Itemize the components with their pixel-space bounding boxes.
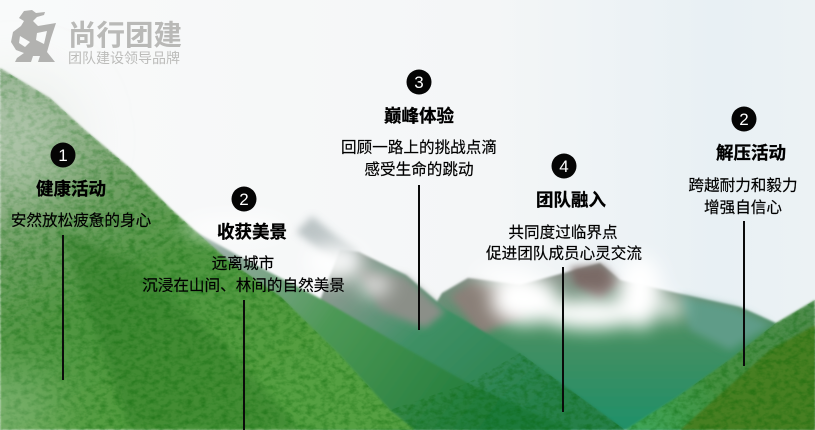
number badge 1: 1 — [58, 146, 68, 165]
description: 促进团队成员心灵交流 — [486, 244, 642, 262]
central ridge — [320, 250, 625, 430]
connector line — [418, 185, 420, 330]
brand name: 尚行团建 — [68, 20, 182, 52]
second forested slope — [187, 227, 572, 430]
right forested slope — [625, 300, 815, 430]
left forested slope — [0, 68, 415, 430]
brand slogan: 团队建设领导品牌 — [68, 50, 180, 66]
number badge 2: 2 — [739, 110, 749, 129]
description: 回顾一路上的挑战点滴 — [341, 138, 497, 156]
number badge 2 — [232, 186, 256, 212]
item: 收获美景 — [142, 186, 345, 430]
heading: 收获美景 — [217, 222, 287, 242]
connector line — [62, 235, 64, 380]
heading: 团队融入 — [536, 190, 606, 210]
description: 跨越耐力和毅力 — [688, 176, 798, 194]
darker right slope foreground — [680, 325, 815, 430]
icon: dragon — [11, 10, 56, 62]
number badge 3: 3 — [414, 73, 424, 92]
description: 增强自信心 — [704, 198, 782, 216]
item: 团队融入 — [486, 154, 642, 412]
heading: 健康活动 — [36, 179, 106, 199]
item: 巅峰体验 — [341, 70, 497, 330]
number badge 3 — [406, 70, 432, 94]
description — [688, 176, 798, 216]
connector line — [743, 221, 745, 366]
item: 健康活动 — [11, 142, 152, 380]
clouds — [185, 217, 682, 329]
distant mountains — [420, 263, 776, 430]
description: 安然放松疲惫的身心 — [11, 212, 152, 230]
description: 沉浸在山间、林间的自然美景 — [142, 276, 345, 294]
number badge 2 — [732, 106, 756, 132]
description — [486, 224, 642, 262]
number badge 4: 4 — [559, 157, 569, 176]
description — [341, 138, 497, 178]
number badge 1 — [50, 142, 76, 168]
heading: 解压活动 — [716, 143, 786, 163]
faint distant peak through the mist — [296, 216, 358, 268]
logo — [11, 10, 182, 66]
number badge 4 — [552, 154, 576, 178]
description: 共同度过临界点 — [508, 224, 618, 242]
grey rock at central ridge top — [355, 268, 445, 328]
description — [142, 254, 345, 294]
rocky mountain faces — [450, 265, 770, 350]
description: 远离城市 — [212, 254, 274, 272]
shaded band on the left slope — [60, 230, 300, 430]
connector line — [562, 267, 564, 412]
item: 解压活动 — [688, 106, 798, 366]
number badge 2: 2 — [239, 190, 249, 209]
heading: 巅峰体验 — [384, 106, 454, 126]
hazy fade over left slope — [0, 80, 75, 430]
description: 感受生命的跳动 — [364, 160, 474, 178]
connector line — [243, 300, 245, 430]
